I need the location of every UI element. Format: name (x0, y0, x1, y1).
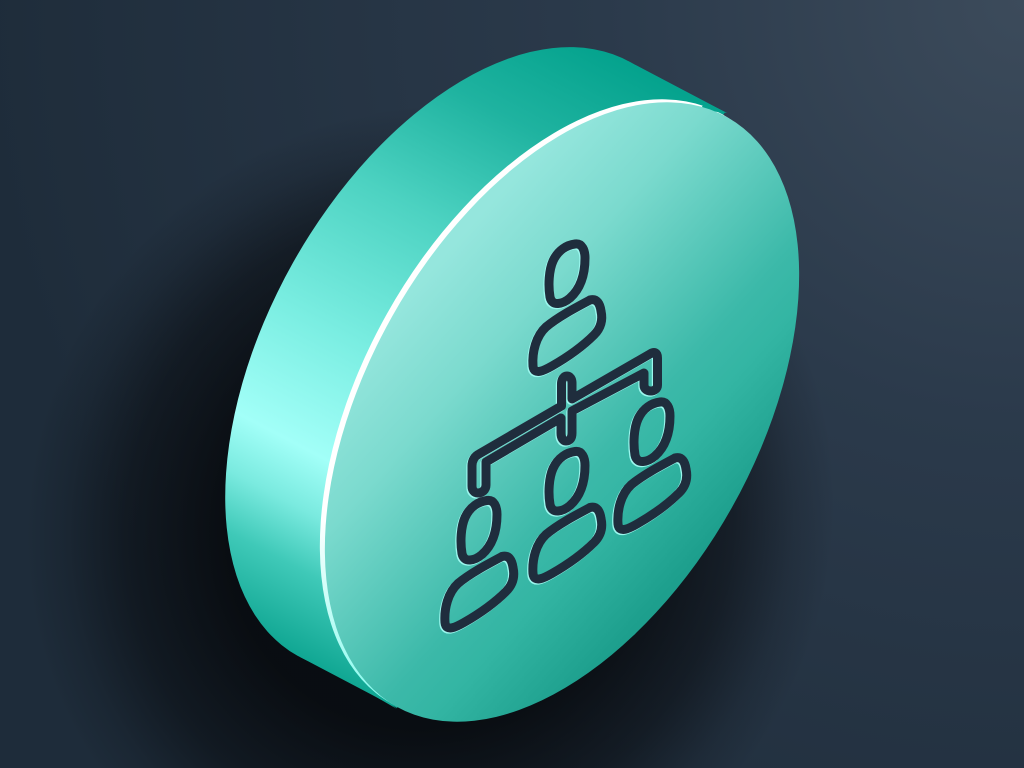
icon: middle person (532, 451, 602, 580)
icon: hierarchy chart (444, 244, 687, 629)
disc face (325, 102, 799, 722)
icon: left person (444, 500, 514, 629)
icon: top person (532, 244, 602, 373)
disc side wall (225, 47, 725, 708)
rim tips trimmed to the side wall colour (352, 102, 727, 709)
icon: right person (617, 402, 687, 531)
rim highlight (320, 99, 794, 719)
icon: connector lines (471, 353, 658, 494)
